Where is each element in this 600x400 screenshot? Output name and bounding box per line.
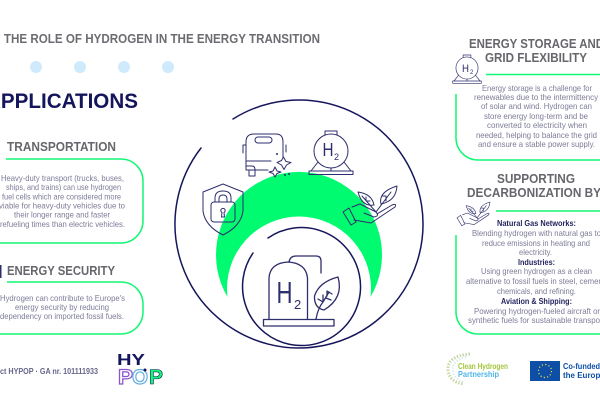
transportation text: viable for heavy-duty vehicles due to (0, 200, 125, 210)
security text: energy security by reducing (15, 302, 109, 312)
logo: Clean Hydrogen Partnership (448, 354, 508, 384)
icon: hydrogen storage with leaf (264, 256, 339, 326)
outer ring (175, 100, 423, 348)
storage frame (456, 74, 600, 160)
decarbonization text: Industries: (518, 257, 555, 267)
security text (0, 293, 125, 321)
transportation text: their longer range and faster (14, 210, 110, 220)
transportation text: ships, and trains) can use hydrogen (6, 182, 121, 192)
storage text (474, 83, 599, 149)
icon: hydrogen tank (309, 131, 353, 174)
security text: Hydrogen can contribute to Europe's (0, 293, 125, 303)
icon: hydrogen storage with leaf: 2 (294, 297, 301, 312)
transportation text: Heavy-duty transport (trucks, buses, (1, 173, 124, 183)
tank label: H (322, 140, 334, 160)
logo: EU co-funded (530, 361, 600, 381)
logo: Clean Hydrogen Partnership: Clean Hydrogen (458, 362, 508, 371)
storage text: of solar and wind. Hydrogen can (481, 101, 592, 111)
icon: hydrogen tank: 2 (334, 152, 339, 162)
central tank label: H (276, 275, 292, 310)
title: 3. THE ROLE OF HYDROGEN IN THE ENERGY TRANSITION (0, 32, 320, 46)
decarbonization text: Natural Gas Networks: (497, 218, 576, 228)
transportation text: refueling times than electric vehicles. (0, 219, 125, 229)
logo: HYPOP: P (149, 366, 163, 389)
security frame (0, 282, 143, 334)
transportation frame (0, 159, 143, 243)
decarbonization text: Aviation & Shipping: (501, 296, 572, 306)
inner ring (243, 228, 361, 346)
decarbonization text: chemicals, and refining. (497, 286, 576, 296)
panel: supporting decarbonization (456, 172, 600, 334)
logo: HYPOP (117, 352, 163, 389)
logo: HYPOP: P (118, 366, 133, 389)
icon: shield with lock (203, 184, 243, 235)
icon: small hydrogen tank: 2 (470, 70, 474, 76)
heading: supporting decarbonization (467, 172, 600, 200)
heading: transportation: TRANSPORTATION (7, 140, 116, 154)
icon: hand with leaves (343, 186, 397, 225)
logo: HYPOP: O (132, 366, 148, 389)
storage text: converted to electricity when (487, 120, 587, 130)
green crescent (216, 172, 382, 297)
heading: energy storage: GRID FLEXIBILITY (485, 51, 588, 65)
transportation text: fuel cells which are considered more (2, 192, 121, 202)
logo: HYPOP: HY (117, 352, 145, 369)
panel: energy storage (453, 37, 600, 160)
heading: supporting decarbonization: SUPPORTING (497, 172, 575, 186)
decarbonization text: electricity. (519, 247, 552, 257)
transportation text (0, 173, 125, 229)
security accent bar (0, 265, 2, 278)
decarbonization text (466, 218, 600, 325)
central diagram (175, 100, 423, 348)
progress dots (30, 61, 174, 73)
small tank label: H (462, 63, 469, 75)
security text: dependency on imported fossil fuels. (0, 311, 124, 321)
heading: energy security: ENERGY SECURITY (7, 264, 116, 278)
panel: energy security (0, 264, 143, 334)
panel: transportation (0, 140, 143, 243)
decarbonization text: reduce emissions in heating and (482, 238, 590, 248)
logo: Clean Hydrogen Partnership: Partnership (458, 370, 499, 379)
heading: energy storage (469, 37, 600, 65)
storage text: store energy long-term and be (484, 111, 588, 121)
decarbonization frame (456, 211, 600, 334)
icon: small hand with leaves (457, 202, 490, 226)
icon: bus (243, 134, 291, 177)
icon: small hydrogen tank (453, 55, 481, 83)
